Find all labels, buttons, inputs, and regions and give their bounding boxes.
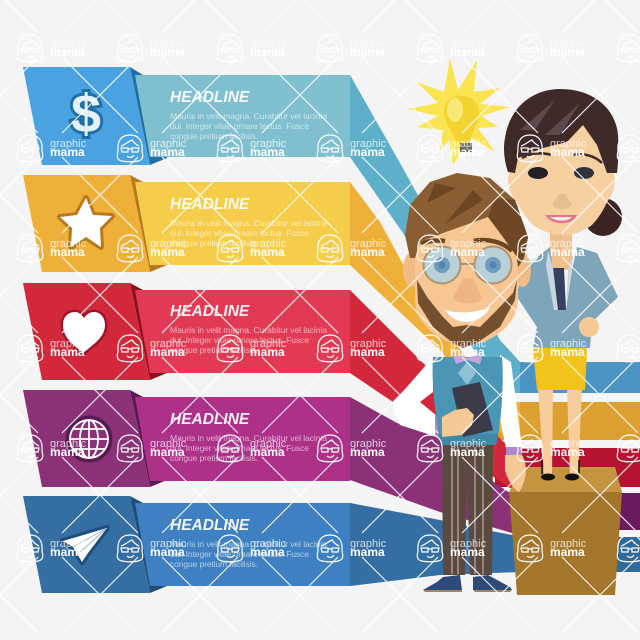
watermark pattern: graphic [350,338,387,350]
watermark pattern: graphic [250,138,287,150]
text block 5: Mauris in velit magna. Curabitur vel lacinia [170,539,327,549]
watermark pattern: mama [50,345,85,359]
tablet [452,382,493,437]
shoe soles [423,590,512,592]
watermark pattern: graphic [550,338,587,350]
text block 2: Mauris in velit magna. Curabitur vel lacinia [170,218,327,228]
watermark pattern: graphic [150,338,187,350]
trouser stripes [452,447,483,574]
watermark pattern: graphic [350,438,387,450]
mouth [545,215,577,223]
watermark pattern: graphic [150,138,187,150]
watermark pattern: mama [450,545,485,559]
shoes [542,460,579,474]
watermark pattern: mama [250,145,285,159]
watermark pattern: graphic [450,238,487,250]
watermark pattern: graphic [150,238,187,250]
watermark pattern: mama [50,145,85,159]
text block 2: dui. Integer vitae ornare lectus. Fusce [170,228,309,238]
watermark pattern: mama [350,545,385,559]
watermark pattern: mama [50,245,85,259]
text block 3 [170,325,327,355]
panel: band 2 yellow [23,175,520,438]
text block 5: congue pretium facilisis. [170,559,258,569]
watermark pattern: graphic [250,238,287,250]
nose [453,278,482,304]
watermark pattern: graphic [250,438,287,450]
box [509,467,622,595]
watermark pattern: graphic [450,138,487,150]
eyebrows [421,240,512,251]
ears and face [508,115,615,235]
glasses [424,246,512,284]
text block 3: Mauris in velit magna. Curabitur vel lacinia [170,325,327,335]
watermark pattern: mama [150,245,185,259]
watermark pattern: graphic [250,538,287,550]
watermark pattern: graphic [550,238,587,250]
trousers [442,445,493,575]
watermark pattern: graphic [50,338,87,350]
panel: band 1 blue [23,67,520,393]
watermark pattern: graphic [550,438,587,450]
watermark pattern: graphic [50,38,87,50]
watermark pattern: graphic [150,538,187,550]
left arm [393,357,437,437]
right hand [505,455,526,492]
watermark pattern: mama [150,145,185,159]
watermark pattern: mama [550,545,585,559]
woman character [504,89,622,480]
watermark pattern: mama [550,145,585,159]
watermark pattern: mama [250,45,285,59]
eyes [434,257,450,273]
headline 2: HEADLINE [170,196,250,213]
icon: paper plane [63,528,107,562]
text block 1 [170,111,327,141]
watermark pattern: graphic [550,138,587,150]
bow tie [452,353,483,364]
watermark pattern: mama [450,45,485,59]
watermark pattern: mama [250,245,285,259]
text block 4: dui. Integer vitae ornare lectus. Fusce [170,443,309,453]
watermark pattern: graphic [550,38,587,50]
bun [584,198,622,236]
hair streaks [427,183,483,224]
watermark pattern: graphic [450,438,487,450]
watermark pattern: mama [50,45,85,59]
watermark pattern: graphic [350,38,387,50]
text block 2 [170,218,327,248]
text block 5: dui. Integer vitae ornare lectus. Fusce [170,549,309,559]
man character [393,173,531,592]
watermark pattern: graphic [550,538,587,550]
face [415,205,518,345]
shoes [423,575,512,590]
watermark pattern: mama [150,45,185,59]
vest [433,357,503,445]
text block 2: congue pretium facilisis. [170,238,258,248]
panel: band 3 red [23,283,520,488]
watermark pattern: mama [150,345,185,359]
watermark pattern: graphic [450,338,487,350]
text block 3: dui. Integer vitae ornare lectus. Fusce [170,335,309,345]
icon: light bulb [408,58,510,165]
hair [504,89,618,173]
watermark pattern: mama [150,545,185,559]
beard [417,280,517,348]
ears [403,253,419,287]
text block 1: dui. Integer vitae ornare lectus. Fusce [170,121,309,131]
text block 1: congue pretium facilisis. [170,131,258,141]
nose [552,194,572,209]
watermark pattern: graphic [50,238,87,250]
watermark pattern: mama [250,445,285,459]
icon: globe [68,418,110,460]
watermark pattern: graphic [350,238,387,250]
watermark pattern: mama [450,145,485,159]
watermark pattern: mama [50,445,85,459]
icon: star [60,198,112,247]
watermark pattern: mama [550,345,585,359]
hand [579,317,599,337]
watermark pattern: mama [350,245,385,259]
watermark pattern: graphic [50,538,87,550]
watermark pattern: mama [350,445,385,459]
watermark pattern: mama [450,245,485,259]
headline 4: HEADLINE [170,411,250,428]
watermark pattern: mama [250,545,285,559]
icon: dollar: $ [71,84,101,144]
text block 1: Mauris in velit magna. Curabitur vel lacinia [170,111,327,121]
right band segments [495,362,640,572]
icon: heart [63,312,105,353]
headline 5: HEADLINE [170,517,250,534]
watermark pattern: graphic [350,538,387,550]
watermark pattern: mama [450,345,485,359]
hand on tablet [442,408,474,437]
panel: band 4 purple [23,390,520,533]
watermark pattern: mama [50,545,85,559]
text block 5 [170,539,327,569]
legs [538,388,582,476]
lapels and top [553,268,566,310]
panel: band 5 blue [23,496,520,593]
watermark pattern: mama [550,445,585,459]
watermark pattern: graphic [150,438,187,450]
watermark pattern: mama [550,245,585,259]
headline 3: HEADLINE [170,303,250,320]
watermark pattern: mama [350,145,385,159]
watermark pattern: mama [250,345,285,359]
smile [445,307,490,322]
watermark pattern: mama [450,445,485,459]
neck [550,228,572,270]
hair [405,173,528,267]
watermark pattern: graphic [150,38,187,50]
text block 4 [170,433,327,463]
watermark pattern: mama [350,45,385,59]
right arm [496,355,522,448]
watermark pattern: graphic [450,38,487,50]
text block 3: congue pretium facilisis. [170,345,258,355]
watermark pattern: graphic [50,138,87,150]
watermark pattern: graphic [250,38,287,50]
watermark pattern: mama [350,345,385,359]
hair streaks [520,100,580,135]
skirt [533,308,587,390]
headline 1: HEADLINE [170,89,250,106]
hair fringe right [488,198,528,267]
watermark pattern: graphic [350,138,387,150]
watermark pattern: mama [550,45,585,59]
watermark pattern: graphic [450,538,487,550]
text block 4: congue pretium facilisis. [170,453,258,463]
watermark pattern: mama [150,445,185,459]
jacket [517,247,618,348]
watermark pattern: graphic [50,438,87,450]
cuffs [435,415,522,455]
eyes [528,167,548,179]
text block 4: Mauris in velit magna. Curabitur vel lacinia [170,433,327,443]
watermark pattern: graphic [250,338,287,350]
